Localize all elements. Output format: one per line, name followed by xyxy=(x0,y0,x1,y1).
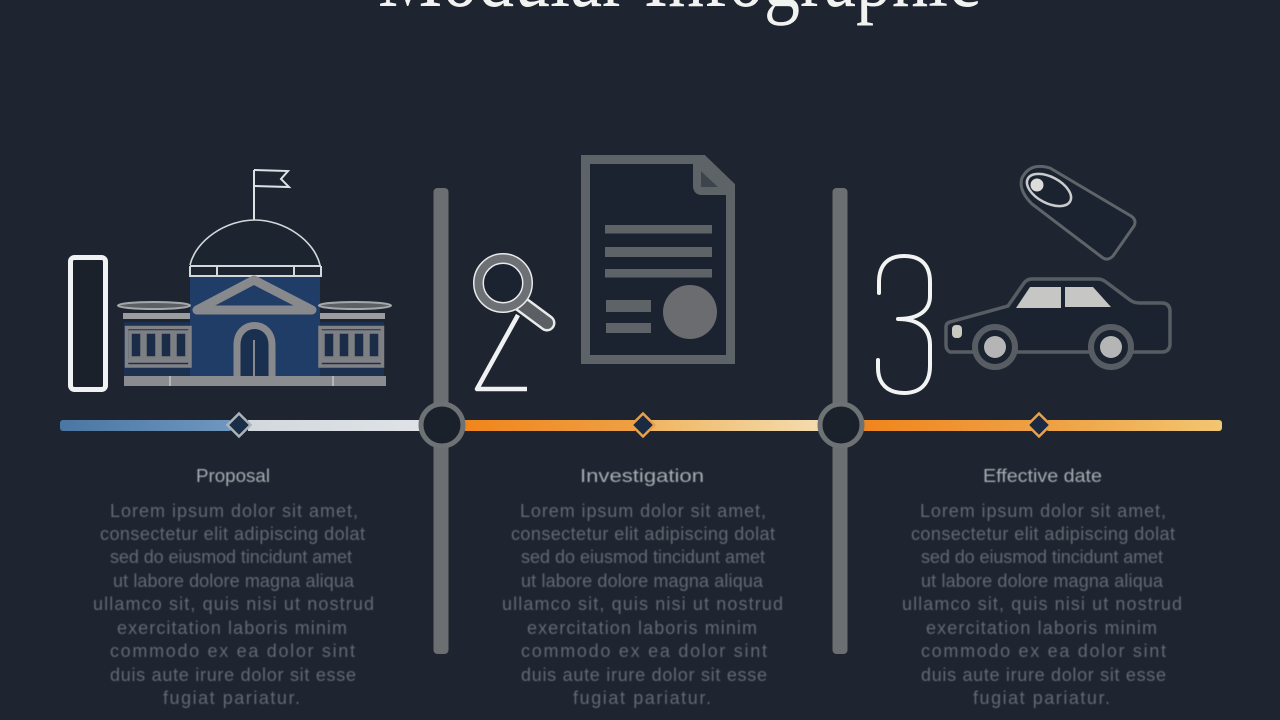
numeral 1 xyxy=(70,258,106,390)
text block: effective date: consectetur elit adipiscing dolat xyxy=(911,524,1175,544)
timeline node 1 xyxy=(421,404,463,446)
timeline node 2 xyxy=(820,404,862,446)
text block: investigation: Lorem ipsum dolor sit amet, xyxy=(520,501,766,521)
numeral 3 xyxy=(878,256,930,393)
icon: document xyxy=(586,160,730,360)
timeline segment: amber xyxy=(1046,420,1222,431)
text block: investigation xyxy=(502,501,783,708)
marker diamond 3 xyxy=(1028,414,1050,436)
text block: effective date: exercitation laboris minim xyxy=(926,618,1157,638)
timeline segment: light xyxy=(248,420,420,431)
icon: car xyxy=(946,279,1170,367)
text block: proposal: ullamco sit, quis nisi ut nostrud xyxy=(93,594,374,614)
panel: effective date xyxy=(864,166,1222,708)
text block: proposal: sed do eiusmod tincidunt amet xyxy=(110,547,352,567)
text block: proposal: commodo ex ea dolor sint xyxy=(110,641,355,661)
text block: investigation: consectetur elit adipiscing dolat xyxy=(511,524,775,544)
vertical divider 1 xyxy=(434,188,448,654)
text block: investigation: duis aute irure dolor sit esse xyxy=(521,665,767,685)
text block: proposal: exercitation laboris minim xyxy=(117,618,347,638)
panel: proposal xyxy=(60,170,420,708)
marker diamond 2 xyxy=(632,414,654,436)
text block: investigation: exercitation laboris minim xyxy=(527,618,757,638)
timeline segment: orange xyxy=(465,420,635,431)
marker diamond 1 xyxy=(228,414,250,436)
text block: investigation: sed do eiusmod tincidunt amet xyxy=(521,547,765,567)
heading: effective date: Effective date xyxy=(983,466,1102,486)
timeline segment: orange xyxy=(864,420,1034,431)
timeline segment: blue xyxy=(60,420,232,431)
vertical divider 2 xyxy=(832,188,848,654)
timeline segment: light orange xyxy=(650,420,820,431)
numeral 2 with magnifier xyxy=(477,258,547,389)
text block: proposal: duis aute irure dolor sit esse xyxy=(110,665,356,685)
text block: effective date: fugiat pariatur. xyxy=(973,688,1110,708)
text block: proposal: ut labore dolore magna aliqua xyxy=(113,571,355,591)
text block: proposal xyxy=(93,501,374,708)
text block: proposal: Lorem ipsum dolor sit amet, xyxy=(110,501,358,521)
text block: proposal: consectetur elit adipiscing dolat xyxy=(100,524,365,544)
text block: effective date: ut labore dolore magna aliqua xyxy=(921,571,1164,591)
text block: investigation: fugiat pariatur. xyxy=(573,688,711,708)
icon: price tag xyxy=(1021,166,1135,259)
text block: effective date xyxy=(902,501,1182,708)
text block: effective date: ullamco sit, quis nisi ut nostrud xyxy=(902,594,1182,614)
text block: effective date: duis aute irure dolor sit esse xyxy=(921,665,1166,685)
text block: effective date: Lorem ipsum dolor sit amet, xyxy=(920,501,1166,521)
icon: government building xyxy=(118,170,391,386)
text block: investigation: commodo ex ea dolor sint xyxy=(521,641,767,661)
heading: proposal: Proposal xyxy=(196,466,270,486)
text block: investigation: ut labore dolore magna aliqua xyxy=(521,571,764,591)
heading: investigation: Investigation xyxy=(580,466,704,486)
text block: effective date: sed do eiusmod tincidunt amet xyxy=(921,547,1163,567)
text block: investigation: ullamco sit, quis nisi ut nostrud xyxy=(502,594,783,614)
text block: effective date: commodo ex ea dolor sint xyxy=(921,641,1166,661)
panel: investigation xyxy=(465,160,820,708)
text block: proposal: fugiat pariatur. xyxy=(163,688,300,708)
